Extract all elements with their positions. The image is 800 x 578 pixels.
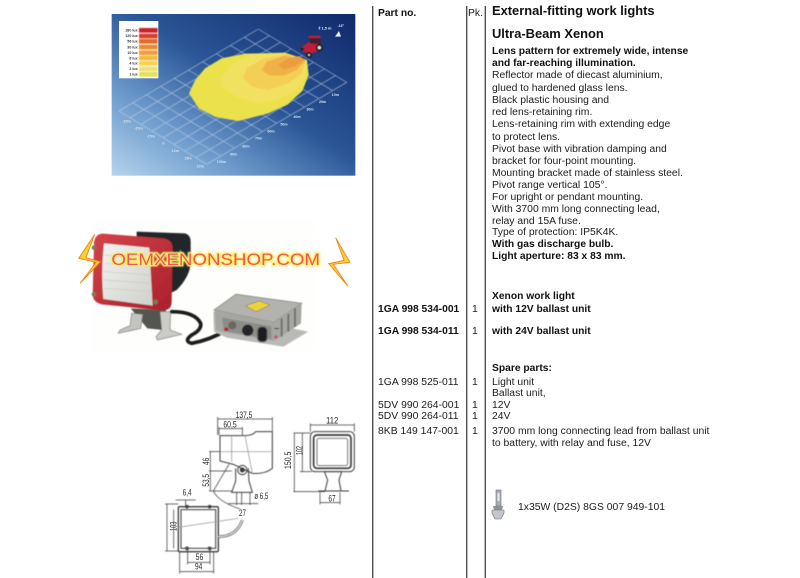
photo background	[92, 218, 313, 352]
dimension values: 112	[326, 415, 338, 425]
ballast front recess	[222, 318, 271, 339]
product description: With 3700 mm long connecting lead,	[492, 204, 660, 215]
mounting height note	[318, 24, 344, 37]
grid scale labels: 90m	[230, 153, 238, 157]
legend: 30 lux	[127, 46, 138, 50]
spare parts rows: Ballast unit,	[492, 388, 546, 399]
dimension values: 102	[294, 446, 304, 455]
spare parts rows: 24V	[492, 411, 511, 422]
ballast warning label	[246, 301, 270, 312]
photo: work lamp with ballast unit: −	[274, 324, 279, 334]
dimension values	[168, 410, 338, 571]
subheading: Ultra-Beam Xenon	[492, 26, 604, 41]
legend	[119, 21, 158, 78]
product description: Lens pattern for extremely wide, intense	[492, 46, 689, 57]
product description: Pivot range vertical 105°.	[492, 180, 607, 191]
grid scale labels: 0	[162, 141, 164, 145]
lamp rear housing	[137, 232, 191, 293]
product description: For upright or pendant mounting.	[492, 192, 643, 203]
grid scale labels: 40m	[293, 115, 301, 119]
front view of lamp	[310, 432, 354, 491]
diagram background	[112, 14, 355, 176]
heading: External-fitting work lights	[492, 3, 655, 18]
product description: red lens-retaining rim.	[492, 107, 592, 118]
product rows	[378, 291, 591, 337]
product rows: 1	[472, 304, 478, 315]
product description: Light aperture: 83 x 83 mm.	[492, 251, 626, 262]
lens ribs	[104, 255, 152, 292]
spare parts rows: 5DV 990 264-001	[378, 400, 460, 411]
product description: Pivot base with vibration damping and	[492, 144, 667, 155]
product rows: with 12V ballast unit	[491, 304, 591, 315]
dimension values: 60,5	[223, 420, 237, 430]
grid scale labels: 20m	[197, 164, 205, 168]
grid scale labels	[122, 93, 340, 168]
dimension values: 27	[239, 508, 246, 518]
watermark text: OEMXENONSHOP.COM	[111, 250, 320, 269]
legend: 120 lux	[125, 34, 138, 38]
grid scale labels: 20m	[319, 100, 327, 104]
panel: light distribution diagram	[112, 14, 355, 176]
grid scale labels: -20m	[134, 127, 144, 131]
table header: pack quantity: Pk.	[468, 8, 483, 19]
product description: to protect lens.	[492, 132, 560, 143]
icon: right lightning bolt	[329, 238, 350, 286]
legend: 10 lux	[127, 51, 138, 55]
product description: bracket for four-point mounting.	[492, 156, 636, 167]
ballast top	[214, 294, 302, 322]
product rows: 1GA 998 534-001	[378, 304, 460, 315]
product description: glued to hardened glass lens.	[492, 83, 628, 94]
product rows: with 24V ballast unit	[491, 326, 591, 337]
product description: Type of protection: IP5K4K.	[492, 227, 618, 238]
icon: D2S xenon bulb	[492, 490, 504, 519]
product description: relay and 15A fuse.	[492, 216, 581, 227]
photo: work lamp with ballast unit: +	[273, 332, 278, 342]
legend: 8 lux	[129, 56, 138, 60]
photo: work lamp with ballast unit	[79, 218, 350, 352]
table header: part no: Part no.	[378, 8, 416, 19]
ballast base plate	[213, 312, 308, 347]
mounting height note: -10°	[338, 24, 344, 28]
legend: 1 lux	[129, 73, 138, 77]
legend: 4 lux	[129, 62, 138, 66]
dimension values: ø 6,5	[254, 491, 268, 501]
lamp red rim	[93, 234, 173, 310]
bulb specification: 1x35W (D2S) 8GS 007 949-101	[518, 502, 665, 513]
mounting height note: ℓ 1,5 m	[318, 25, 332, 30]
icon: left lightning bolt	[79, 234, 101, 283]
icon: tractor	[301, 36, 323, 58]
grid scale labels: 30m	[306, 108, 314, 112]
ballast connectors	[228, 321, 236, 329]
lamp screws	[92, 245, 163, 304]
spare parts rows: 3700 mm long connecting lead from ballast unit	[492, 426, 710, 437]
dimension values: 103	[168, 522, 178, 531]
product description: Reflector made of diecast aluminium,	[492, 70, 663, 81]
technical dimension drawing	[165, 410, 354, 574]
grid scale labels: 100m	[217, 160, 227, 164]
product description: Mounting bracket made of stainless steel.	[492, 168, 683, 179]
product rows: 1GA 998 534-011	[378, 326, 459, 337]
grid scale labels: 10m	[172, 149, 180, 153]
dimension values: 67	[328, 494, 336, 504]
dimension values: 46	[201, 458, 211, 465]
legend: 180 lux	[125, 29, 138, 33]
ballast front face	[215, 311, 274, 341]
product description: Lens-retaining rim with extending edge	[492, 119, 670, 130]
grid scale labels: 70m	[255, 137, 263, 141]
table column rules	[373, 6, 485, 578]
product description: and far-reaching illumination.	[492, 58, 636, 69]
spare parts rows: to battery, with relay and fuse, 12V	[492, 438, 651, 449]
dimension values: 94	[195, 561, 202, 571]
product description: With gas discharge bulb.	[492, 239, 614, 250]
grid scale labels: 80m	[242, 145, 250, 149]
dimension values: 150,5	[283, 452, 293, 469]
spare parts rows: 1GA 998 525-011	[378, 377, 459, 388]
dimension values: 56	[196, 552, 203, 562]
product description: Black plastic housing and	[492, 95, 609, 106]
side view of lamp	[220, 432, 272, 492]
light pattern contours	[189, 53, 309, 121]
spare parts rows: 5DV 990 264-011	[378, 411, 459, 422]
ballast top view	[178, 505, 242, 552]
ballast side fins	[274, 303, 302, 341]
ground grid	[119, 29, 347, 164]
spare parts rows: 1	[472, 411, 478, 422]
grid scale labels: -25m	[122, 119, 132, 123]
connecting cable	[172, 312, 227, 343]
spare parts rows: Spare parts:	[492, 363, 552, 374]
grid scale labels: 10m	[332, 93, 340, 97]
legend: 2 lux	[129, 67, 138, 71]
product rows: Xenon work light	[492, 291, 575, 302]
spare parts rows: 1	[472, 400, 478, 411]
legend: 56 lux	[127, 40, 138, 44]
spare parts rows: 12V	[492, 400, 511, 411]
spare parts rows: 8KB 149 147-001	[378, 426, 459, 437]
spare parts rows: Light unit	[492, 377, 534, 388]
product rows: 1	[472, 326, 478, 337]
lamp mounting bracket	[118, 308, 182, 340]
spare parts rows	[378, 363, 710, 449]
dimension lines	[165, 417, 354, 574]
dimension values: 53,5	[201, 474, 211, 487]
grid scale labels: 60m	[267, 130, 275, 134]
dimension values: 6,4	[183, 488, 192, 498]
lamp lens	[102, 243, 153, 306]
dimension values: 137,5	[236, 410, 252, 420]
grid scale labels: 50m	[280, 122, 288, 126]
grid scale labels: -15m	[146, 134, 156, 138]
watermark text: OEMXENONSHOP.COM	[111, 250, 320, 269]
spare parts rows: 1	[472, 426, 478, 437]
product description	[492, 46, 689, 262]
spare parts rows: 1	[472, 377, 478, 388]
grid scale labels: 15m	[184, 156, 192, 160]
